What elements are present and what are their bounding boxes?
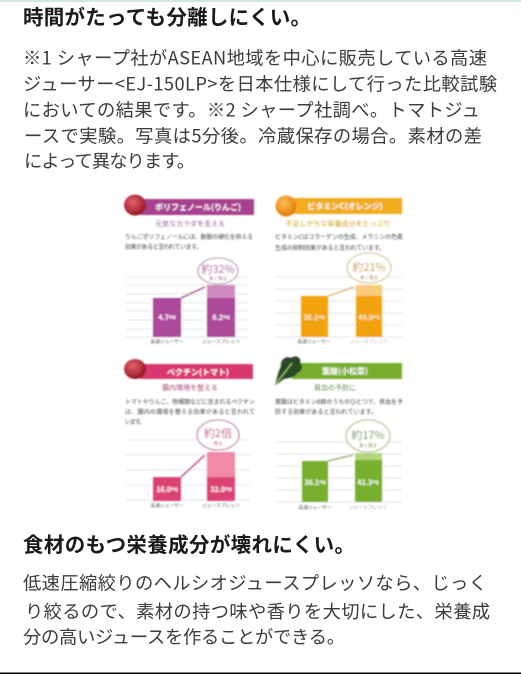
icon: orange	[276, 196, 296, 216]
callout: 21%	[347, 253, 391, 283]
bar chart: polyphenol	[126, 277, 248, 345]
description: りんごポリフェノールには、動脈の硬化を抑える	[125, 232, 253, 241]
callout: 17%	[346, 420, 390, 452]
text block: test notes: ※1 シャープ社がASEAN地域を中心に販売している高速	[23, 44, 487, 70]
bar chart: vitamin C: 高速ジューサー	[297, 338, 331, 345]
icon: apple	[124, 194, 146, 216]
panel: pectin (tomato)	[124, 359, 255, 509]
text block: test notes: ースで実験。写真は5分後。冷蔵保存の場合。素材の差	[24, 122, 482, 148]
description: 葉酸はビタミンB群のうちのひとつで、貧血を予	[275, 397, 403, 406]
text block: test notes: においての結果です。※2 シャープ社調べ。トマトジュ	[23, 96, 480, 122]
bar chart: pectin: 高速ジューサー	[150, 502, 184, 509]
description	[125, 232, 253, 251]
text block: test notes: ジューサー<EJ-150LP>を日本仕様にして行った比較試験	[23, 70, 497, 96]
panel: polyphenol (apple)	[124, 194, 254, 345]
description	[275, 232, 403, 252]
banner: pectin: ペクチン(トマト)	[167, 367, 229, 378]
text block: test notes: によって異なります。	[24, 148, 195, 174]
description	[275, 397, 403, 416]
bar chart: vitamin C: 36.1ᵐᵍ	[303, 313, 325, 323]
bar chart: pectin: 32.0ᵐᵍ	[210, 485, 232, 495]
bar chart: polyphenol: 4.7ᵐᵍ	[158, 313, 176, 323]
banner: folate	[292, 363, 402, 379]
bar chart: vitamin C: ジュースプレッソ	[350, 338, 388, 345]
description: 防する効果があると言われています。	[275, 407, 377, 416]
top edge strip	[0, 0, 521, 2]
heading: nutrients: 食材のもつ栄養成分が壊れにくい。	[23, 528, 355, 558]
description	[125, 397, 255, 426]
text block: nutrients description: 分の高いジュースを作ることができる。	[23, 624, 345, 650]
bar chart: folate: 36.1ᵐᵍ	[304, 478, 326, 488]
banner: pectin	[140, 364, 253, 379]
panel: folate (komatsuna)	[275, 356, 403, 511]
bar chart: pectin: 16.0ᵐᵍ	[156, 485, 178, 495]
bar chart: vitamin C: 44.0ᵐᵍ	[358, 313, 380, 323]
bar chart: pectin	[126, 440, 250, 509]
bar chart: pectin: ジュースプレッソ	[202, 502, 240, 509]
description: います。	[125, 417, 145, 426]
bar chart: polyphenol: 6.2ᵐᵍ	[212, 313, 230, 323]
banner: vitamin C	[288, 198, 402, 214]
text block: nutrients description: 低速圧縮絞りのヘルシオジュースプレッソなら、じっく	[23, 570, 487, 596]
callout: 21%: 約21%	[352, 259, 386, 275]
subtitle: 腸内環境を整える	[162, 383, 218, 393]
bar chart: folate: 高速ジューサー	[298, 504, 332, 511]
subtitle: 貧血の予防に	[314, 383, 356, 393]
description: ビタミンCはコラーゲンの生成、メラニンの色素	[275, 232, 403, 241]
text block: test notes	[23, 44, 497, 174]
callout: 17%: 多く残る	[359, 442, 377, 449]
description: 効果があると言われています。	[125, 242, 202, 251]
text block: nutrients description	[23, 570, 490, 650]
text block: nutrients description: り絞るので、素材の持つ味や香りを大切にした、栄養成	[25, 598, 490, 624]
subtitle: 不足しがちな栄養成分をたっぷり	[286, 219, 390, 229]
bar chart: polyphenol: 高速ジューサー	[150, 338, 184, 345]
panel: vitamin C (orange)	[275, 196, 403, 345]
banner: folate: 葉酸(小松菜)	[322, 366, 368, 377]
callout: 32%	[198, 258, 238, 284]
icon: leafy greens	[275, 356, 302, 385]
bar chart: folate	[276, 442, 402, 511]
bottom black bar	[0, 672, 521, 674]
subtitle: 元気なカラダを支える	[155, 219, 225, 229]
heading: separation: 時間がたっても分離しにくい。	[23, 0, 311, 30]
bar chart: folate: ジュースプレッソ	[349, 504, 387, 511]
description: 生成の抑制効果があると言われています。	[275, 243, 385, 252]
callout: 2x: 残る	[214, 440, 222, 447]
bar chart: polyphenol: ジュースプレッソ	[202, 338, 240, 345]
callout: 2x: 約2倍	[204, 425, 232, 441]
callout: 21%: 多く残る	[360, 274, 378, 281]
description: トマトやりんご、柑橘類などに含まれるペクチン	[125, 397, 255, 406]
banner: vitamin C: ビタミンC(オレンジ)	[307, 201, 383, 212]
callout: 2x	[197, 420, 239, 450]
icon: tomato	[124, 359, 146, 379]
description: は、腸内の環境を整える効果があると言われて	[125, 407, 255, 416]
callout: 32%: 多く残る	[209, 275, 227, 282]
banner: polyphenol	[140, 199, 254, 215]
callout: 17%: 約17%	[351, 427, 385, 443]
bar chart: folate: 42.3ᵐᵍ	[357, 478, 379, 488]
bar chart: vitamin C	[276, 277, 402, 345]
callout: 32%: 約32%	[201, 261, 235, 277]
banner: polyphenol: ポリフェノール(りんご)	[155, 202, 241, 213]
